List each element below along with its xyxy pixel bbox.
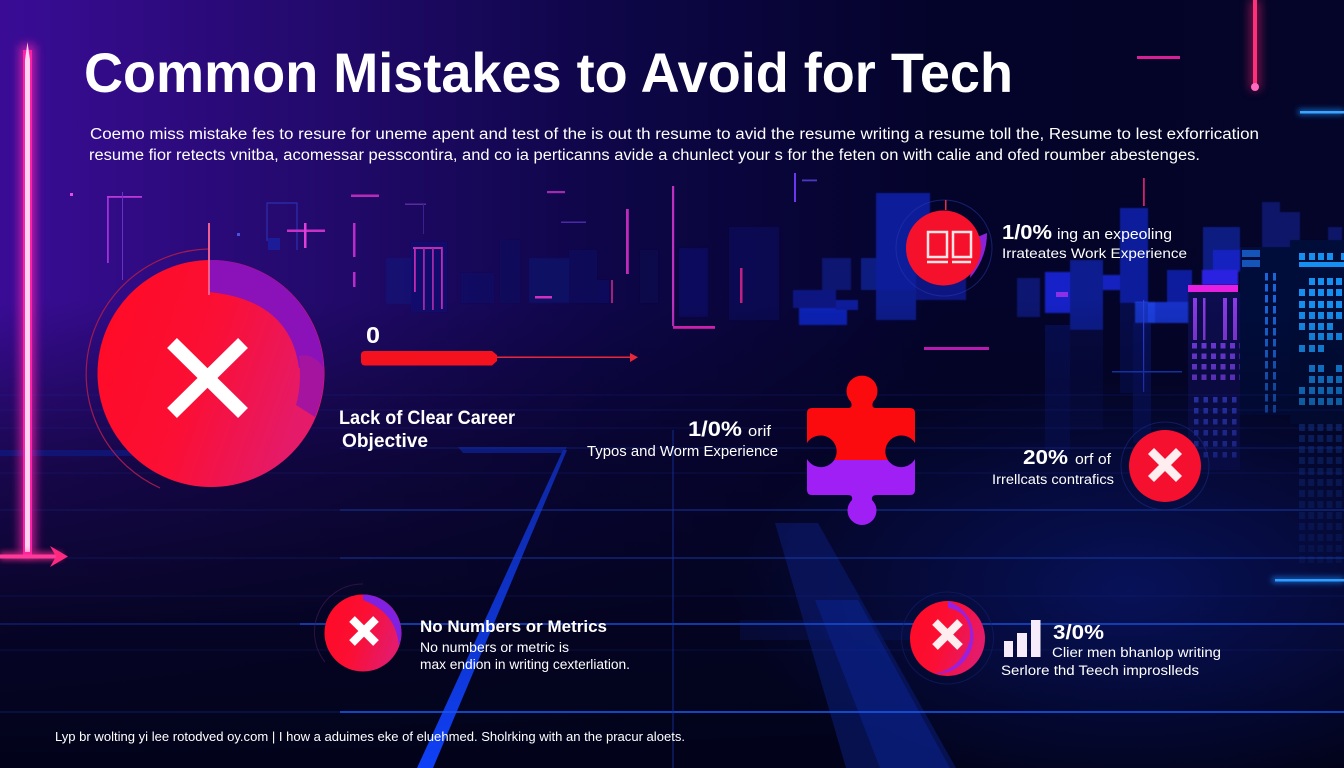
mistake: no numbers or metrics xyxy=(314,584,630,672)
background: navy glow lower right xyxy=(730,380,1344,768)
text: work experience xyxy=(1002,222,1187,261)
icon: bar chart xyxy=(1004,620,1040,657)
intro text: resume fior retects vnitba, acomessar pesscontira, and co ia perticanns avide a chunlect your s for the feten on with calie and ofed roumber abestenges. xyxy=(89,147,1200,164)
background: reflections under the skyline xyxy=(1045,303,1151,455)
background: neon accents in the skyline xyxy=(70,56,1182,392)
text: tech improvements: Clier men bhanlop writing xyxy=(1052,645,1221,660)
icon: red x circle xyxy=(1121,422,1209,510)
intro text: Coemo miss mistake fes to resure for uneme apent and test of the is out th resume to avid the resume writing a resume toll the, Resume to lest exforrication xyxy=(90,126,1259,143)
label: career objective xyxy=(339,408,516,452)
text: typos: orif xyxy=(748,423,772,440)
background: tower windows xyxy=(1188,250,1344,564)
text: tech improvements: 3/0% xyxy=(1053,622,1104,644)
text: work experience: ing an expeoling xyxy=(1057,227,1172,243)
footer text: Lyp br wolting yi lee rotodved oy.com | I how a aduimes eke of eluehmed. Sholrking with an the pracur aloets. xyxy=(55,730,685,744)
mistake: irrelevant contents xyxy=(992,422,1209,510)
text: typos: Typos and Worm Experience xyxy=(587,444,778,460)
text: tech improvements: Serlore thd Teech improslleds xyxy=(1001,663,1199,678)
text: irrelevant contents: Irrellcats contrafics xyxy=(992,472,1114,487)
text: typos: 1/0% xyxy=(688,418,742,441)
text: no numbers or metrics xyxy=(420,617,630,672)
intro text xyxy=(89,126,1259,164)
neon accent: top right xyxy=(1250,0,1260,91)
text: no numbers or metrics: No Numbers or Metrics xyxy=(420,617,607,636)
icon: red x circle with purple arc xyxy=(902,592,994,684)
icon: book in red circle xyxy=(896,200,992,296)
label: career objective: Lack of Clear Career xyxy=(339,408,516,429)
mistake: irrelevant work experience xyxy=(896,200,1187,296)
icon: large red x donut xyxy=(86,223,324,488)
progress bar with arrow xyxy=(361,322,638,366)
text: no numbers or metrics: max endion in writing cexterliation. xyxy=(420,657,630,672)
label: career objective: Objective xyxy=(342,431,428,452)
icon: puzzle piece xyxy=(807,376,915,525)
background: perspective road xyxy=(0,447,956,768)
mistake: typos xyxy=(587,376,915,525)
neon arrow: left vertical and horizontal xyxy=(0,42,68,567)
main mistake: lack of clear career objective xyxy=(86,223,638,488)
text: work experience: 1/0% xyxy=(1002,222,1052,244)
blue glow streaks: right edge xyxy=(1272,109,1344,583)
title: Common Mistakes to Avoid for Tech xyxy=(84,41,1013,104)
text: irrelevant contents: orf of xyxy=(1075,451,1112,468)
mistake: tech improvements xyxy=(902,592,1221,684)
icon: red x circle with purple arc xyxy=(314,584,402,672)
background: horizontal grid lines xyxy=(0,395,1344,768)
background: darkening lower floor xyxy=(0,300,1344,768)
text: work experience: Irrateates Work Experience xyxy=(1002,245,1187,261)
text: no numbers or metrics: No numbers or metric is xyxy=(420,640,569,655)
progress bar with arrow: 0 xyxy=(366,322,380,348)
text: tech improvements xyxy=(1001,622,1221,678)
background: neon city skyline xyxy=(793,193,1344,470)
text: irrelevant contents: 20% xyxy=(1023,447,1068,469)
background: dim distant skyline xyxy=(386,227,779,320)
text: irrelevant contents xyxy=(992,447,1114,487)
text: typos xyxy=(587,418,778,460)
